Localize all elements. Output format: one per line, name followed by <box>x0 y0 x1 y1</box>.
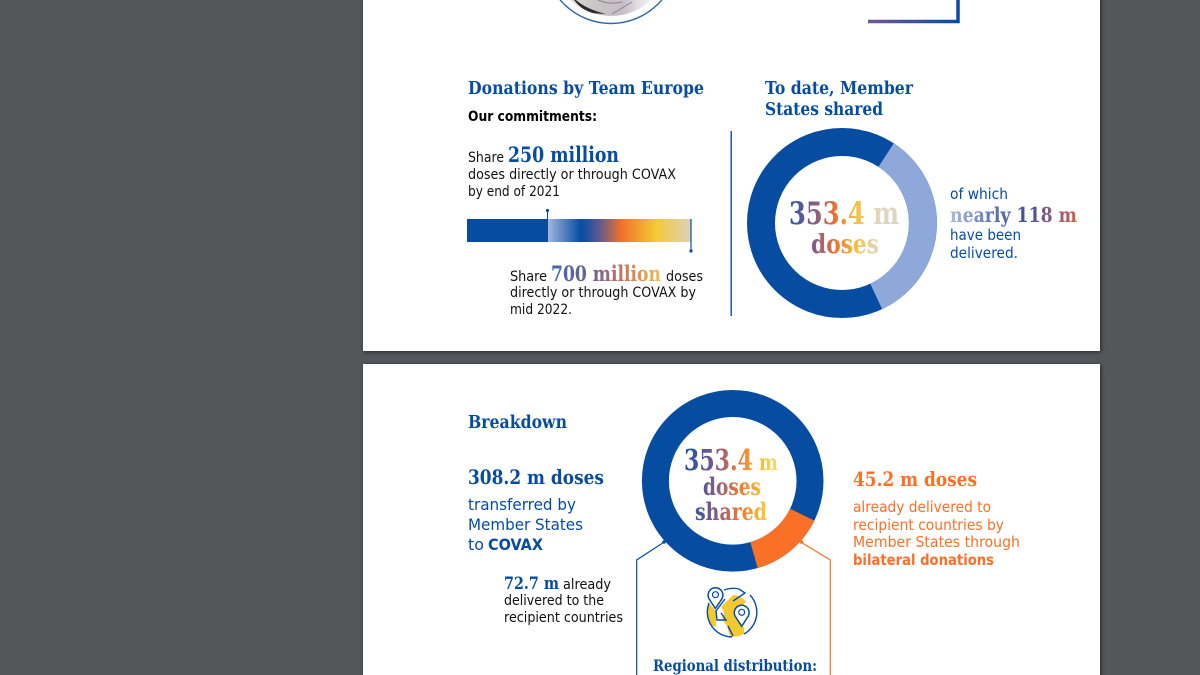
text: delivered to recipients: recipient countries <box>504 610 623 626</box>
donut chart: shared and delivered: 353.4 m <box>789 196 899 232</box>
icon: globe with map pins <box>707 588 757 637</box>
donut chart: shared and delivered <box>761 142 923 304</box>
text: delivered to recipients: 72.7 m <box>504 574 559 594</box>
heading: to date: To date, Member <box>765 79 914 99</box>
text: bilateral donations: already delivered to <box>853 498 991 516</box>
text: 700 million commitment: doses <box>666 269 703 285</box>
text: 250 million commitment <box>468 142 676 200</box>
text: of which delivered: have been <box>950 226 1021 244</box>
text: delivered to recipients <box>504 574 623 626</box>
donut chart: breakdown <box>655 404 810 558</box>
panel: lower page <box>363 364 1100 675</box>
text: 700 million commitment: Share <box>510 269 547 285</box>
donut chart: breakdown: shared <box>695 497 767 526</box>
text: covax transfer: to <box>468 535 484 554</box>
text: of which delivered: delivered. <box>950 244 1018 262</box>
text: 250 million commitment: Share <box>468 150 504 166</box>
donut chart: breakdown: 353.4 <box>684 443 753 477</box>
heading: regional distribution: Regional distribution: <box>653 656 817 675</box>
text: delivered to recipients: already <box>563 577 611 593</box>
text: of which delivered: nearly 118 m <box>950 203 1077 227</box>
donut chart: shared and delivered: doses <box>811 230 879 260</box>
text: 700 million commitment <box>510 261 703 318</box>
heading: to date: States shared <box>765 100 883 120</box>
text: covax transfer <box>468 465 604 554</box>
text: 250 million commitment: 250 million <box>508 142 619 167</box>
donut chart: breakdown: m <box>759 450 778 476</box>
text: covax transfer: COVAX <box>488 535 544 554</box>
connector: orange <box>800 540 830 675</box>
text: 700 million commitment: directly or through COVAX by <box>510 285 696 301</box>
subheading: our commitments: Our commitments: <box>468 109 597 125</box>
divider <box>730 131 732 316</box>
heading: breakdown: Breakdown <box>468 413 567 433</box>
text: of which delivered: of which <box>950 185 1008 203</box>
progress bar <box>467 209 693 253</box>
text: 700 million commitment: 700 million <box>551 261 661 286</box>
text: covax transfer: Member States <box>468 515 583 534</box>
text: bilateral donations <box>853 467 1020 569</box>
panel: upper page <box>363 0 1100 351</box>
text: bilateral donations: recipient countries by <box>853 516 1004 534</box>
text: 250 million commitment: by end of 2021 <box>468 184 560 200</box>
heading: donations by team europe: Donations by Team Europe <box>468 79 704 99</box>
text: 250 million commitment: doses directly or through COVAX <box>468 167 676 183</box>
text: bilateral donations: Member States through <box>853 533 1020 551</box>
text: of which delivered <box>950 185 1077 262</box>
connector: blue <box>637 540 666 675</box>
text: bilateral donations: bilateral donations <box>853 551 994 569</box>
text: covax transfer: 308.2 m doses <box>468 465 604 489</box>
text: delivered to recipients: delivered to the <box>504 593 604 609</box>
heading: to date <box>765 79 914 120</box>
donut chart: breakdown: doses <box>703 472 761 501</box>
corner frame <box>868 0 958 22</box>
text: 700 million commitment: mid 2022. <box>510 302 572 318</box>
text: bilateral donations: 45.2 m doses <box>853 467 977 491</box>
text: covax transfer: transferred by <box>468 495 576 514</box>
photo circle <box>559 0 663 24</box>
